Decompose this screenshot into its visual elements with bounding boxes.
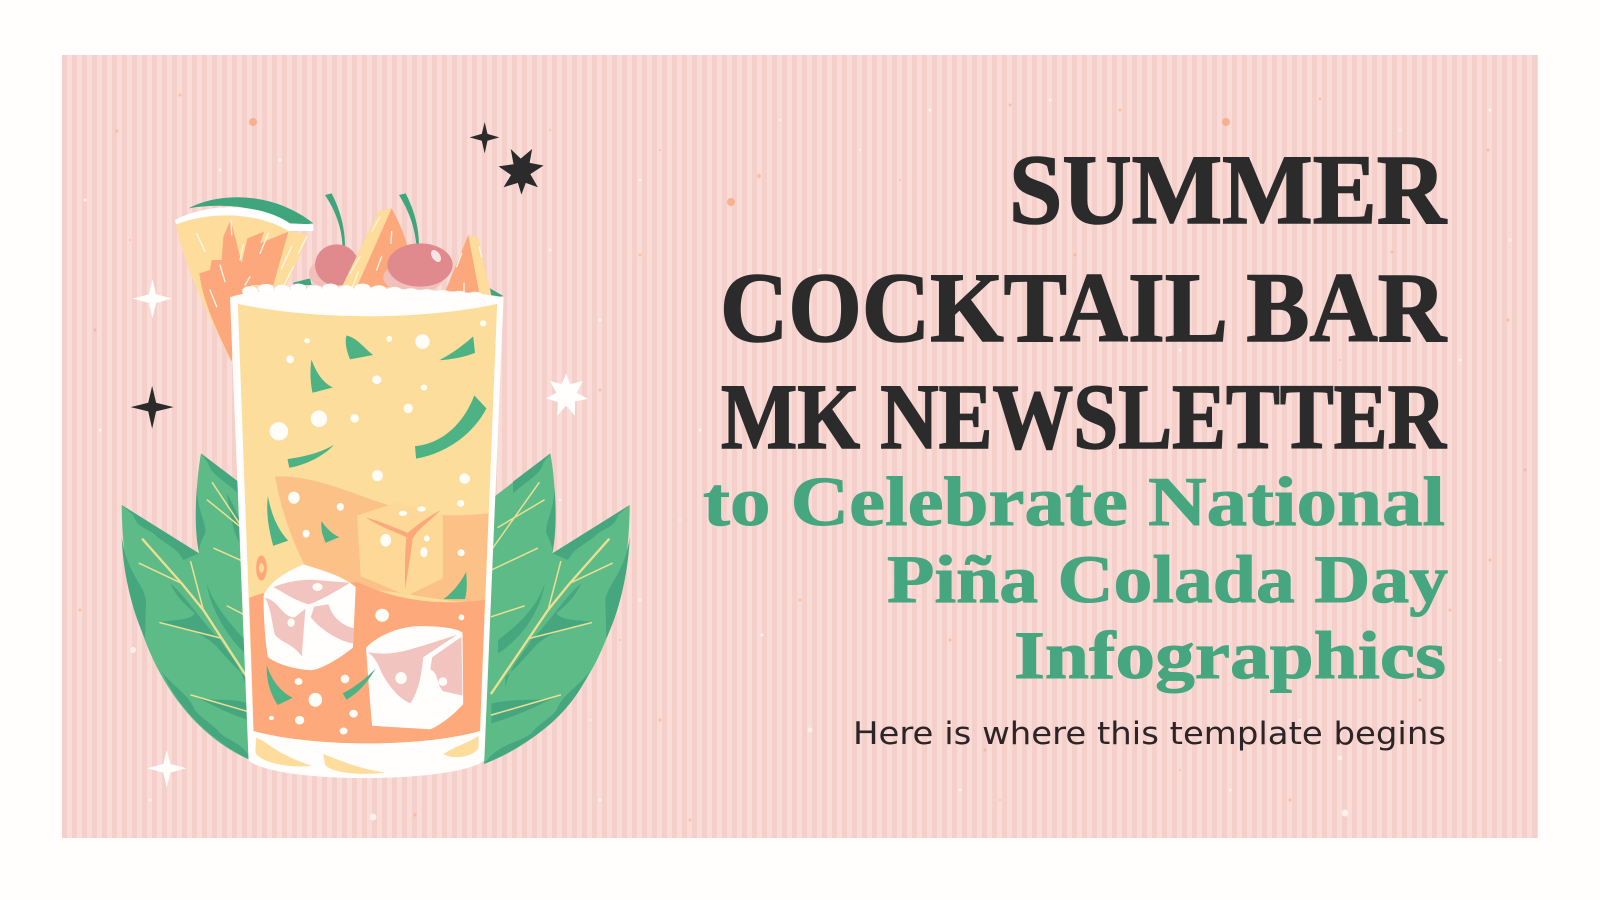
icon: bubbles xyxy=(269,320,486,734)
icon: green mint flecks xyxy=(267,336,486,705)
liquid: peach layer xyxy=(275,476,489,602)
subtitle: green lines: Piña Colada Day xyxy=(887,541,1448,617)
liquid: yellow layer xyxy=(238,304,497,743)
icon: ice cube right xyxy=(366,626,463,729)
subtitle: green lines: Infographics xyxy=(1014,617,1446,693)
illustration layer in reference crop coordinates xyxy=(131,122,588,787)
icon: black eight-point star xyxy=(499,149,544,195)
tagline: Here is where this template begins xyxy=(853,716,1446,752)
background speckles xyxy=(78,94,1526,822)
icon: pineapple slice xyxy=(175,197,313,362)
icon: white star right xyxy=(546,374,588,416)
icon: black four-point sparkle left xyxy=(131,386,174,429)
subtitle: green lines: to Celebrate National xyxy=(703,464,1445,541)
icon: right leaves xyxy=(481,453,630,764)
title: dark lines: SUMMER xyxy=(1009,134,1448,245)
icon: white four-point sparkle bottom xyxy=(147,750,186,787)
icon: left leaves xyxy=(122,453,270,761)
icon: glass xyxy=(230,283,504,778)
icon: white four-point sparkle upper left xyxy=(133,279,172,318)
icon: ice cube left xyxy=(264,564,356,670)
title: dark lines: COCKTAIL BAR xyxy=(720,252,1448,363)
title: dark lines: MK NEWSLETTER xyxy=(721,366,1447,469)
subtitle: green lines xyxy=(703,464,1448,693)
icon: black four-point sparkle top xyxy=(470,122,499,153)
icon: cherries and fruit wedges xyxy=(293,193,503,298)
glass base highlights xyxy=(255,736,479,774)
illustration: cocktail xyxy=(122,122,630,787)
icon: yellow ice cube xyxy=(357,502,443,596)
liquid: orange layer xyxy=(249,582,485,743)
title: dark lines xyxy=(720,134,1448,469)
